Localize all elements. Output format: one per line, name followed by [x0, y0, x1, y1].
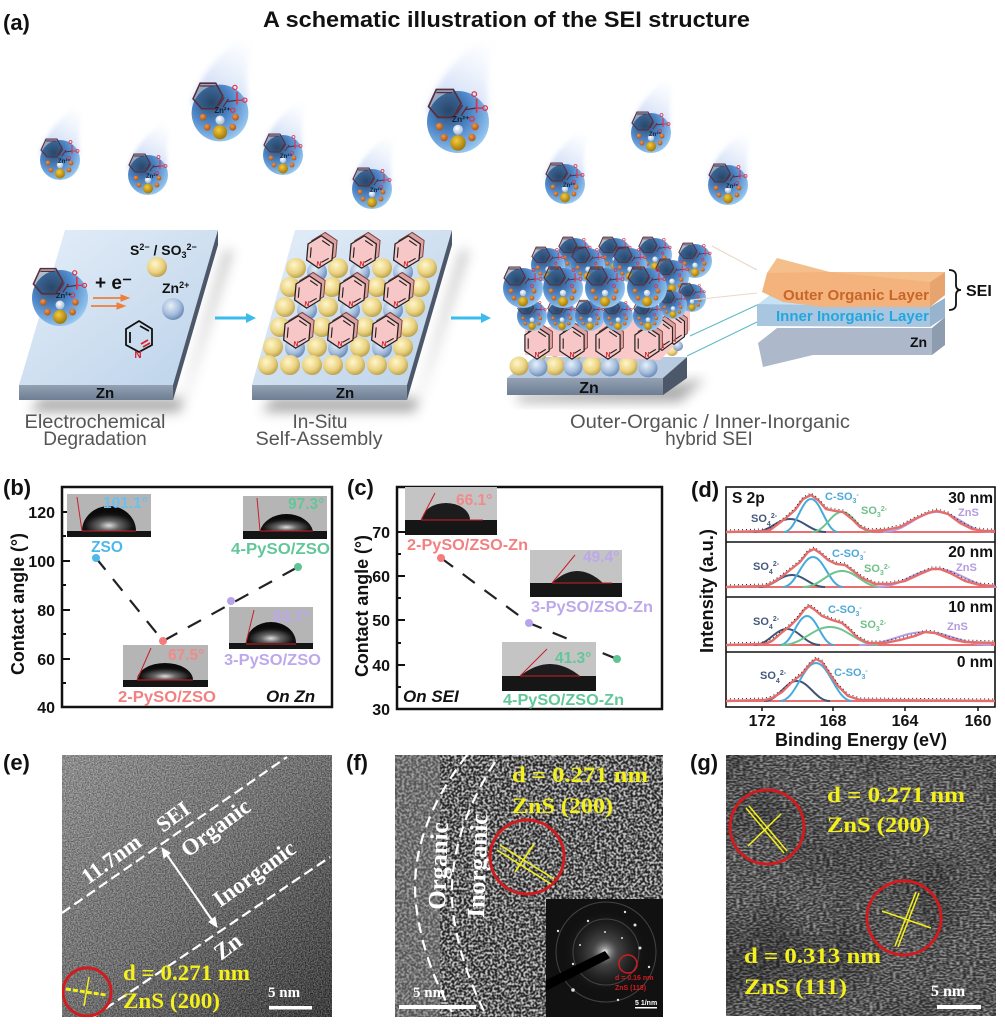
inset: 2-PySO droplet: 67.5°	[168, 647, 204, 664]
depth label 30 nm: 30 nm	[948, 490, 993, 507]
inset: 2-PySO-Zn droplet	[405, 487, 497, 535]
panel: layer diagram	[757, 258, 945, 367]
0 nm peak labels: C-SO	[834, 667, 862, 679]
lattice circle	[63, 968, 111, 1016]
dashed layer boundaries	[415, 755, 495, 1017]
panel: electrochemical degradation	[19, 230, 232, 412]
label: Organic: Organic	[424, 822, 454, 910]
10 nm peak labels: SO	[753, 616, 769, 628]
layer: inner inorganic	[757, 295, 945, 327]
10 nm peak labels: 4	[769, 624, 773, 631]
label: 4-PySO/ZSO: 4-PySO/ZSO	[231, 541, 330, 558]
phase label: ZnS (200)	[512, 793, 613, 818]
label: On SEI: On SEI	[403, 687, 460, 706]
inset: 3-PySO-Zn droplet: 49.4°	[583, 549, 619, 566]
30 nm peak labels: 2-	[881, 506, 888, 513]
inset: 4-PySO-Zn droplet	[502, 642, 596, 691]
y axis title: Contact angle (°)	[352, 535, 372, 677]
zinc ion label: Zn	[162, 280, 179, 296]
panel: TEM image f	[395, 755, 663, 1017]
dashed SEI boundaries	[62, 757, 330, 1017]
panel: TEM image g	[726, 755, 996, 1016]
d-spacing label 200: d = 0.271 nm	[827, 782, 965, 807]
zinc ion label: 2+	[179, 280, 189, 290]
30 nm peak labels: -	[856, 492, 859, 499]
30 nm peak labels: SO	[751, 513, 767, 525]
droplet 3 large	[192, 25, 260, 141]
droplet 6 large	[427, 26, 501, 153]
x tick labels: 168	[820, 713, 846, 730]
30 nm peak labels	[751, 491, 979, 528]
inset: 2-PySO droplet	[123, 645, 208, 687]
20 nm peak labels: -	[863, 549, 866, 556]
droplet 8: Zn²⁺	[649, 131, 662, 138]
zoom guide lines	[687, 246, 757, 356]
droplet 7: Zn²⁺	[563, 182, 576, 189]
caption: in-situ self-assembly	[256, 412, 383, 450]
30 nm peak labels: 2-	[771, 513, 778, 520]
depth label 10 nm: 10 nm	[948, 599, 993, 616]
droplet 9: Zn²⁺	[726, 183, 738, 190]
10 nm peak labels: 2-	[773, 616, 780, 623]
depth label 20 nm: 20 nm	[948, 544, 993, 561]
label: Organic: Organic	[176, 794, 255, 862]
label: outer organic layer: Outer Organic Layer	[783, 287, 929, 304]
20 nm peak labels: SO	[753, 561, 769, 573]
10 nm peak labels	[753, 604, 968, 633]
30 nm peak labels: 3	[852, 498, 856, 505]
0 nm peak labels: 4	[776, 678, 780, 685]
droplet 4	[263, 93, 311, 175]
stacked droplet layer	[503, 237, 712, 331]
data points	[437, 554, 621, 663]
20 nm peak labels: SO	[864, 563, 880, 575]
sulfur and zinc ball array	[258, 258, 437, 375]
panel: in-situ self-assembly	[252, 230, 468, 412]
phase label 111: ZnS (111)	[744, 974, 847, 999]
label: 2-PySO/ZSO-Zn: 2-PySO/ZSO-Zn	[407, 537, 528, 554]
label: ZSO: ZSO	[91, 539, 123, 556]
y axis title: Contact angle (°)	[8, 533, 28, 675]
SAED d-spacing label: d = 0.16 nm	[615, 975, 653, 982]
icon: pyridine molecule: N	[134, 350, 142, 361]
caption: electrochemical degradation: Electrochemical	[24, 412, 166, 433]
30 nm peak labels: 4	[767, 521, 771, 528]
Zn label: Zn	[96, 385, 114, 402]
phase label 200: ZnS (200)	[827, 812, 930, 837]
droplet 5	[352, 127, 400, 209]
y tick labels: 40	[372, 658, 390, 675]
x axis title: Binding Energy (eV)	[775, 730, 947, 750]
inset: 3-PySO droplet: 83.7°	[273, 609, 309, 626]
10 nm peak labels: 2-	[880, 620, 887, 627]
droplet 8	[631, 71, 679, 153]
y tick labels: 60	[37, 652, 55, 669]
Zn label: Zn	[336, 385, 354, 402]
30 nm peak labels: 3	[877, 512, 881, 519]
y tick labels: 60	[372, 569, 390, 586]
0 nm peak labels: 3	[862, 674, 866, 681]
droplet 7	[545, 122, 593, 204]
spectrum 20 nm	[726, 544, 997, 587]
label: SEI: SEI	[151, 796, 195, 837]
30 nm peak labels: SO	[861, 505, 877, 517]
20 nm peak labels: C-SO	[832, 548, 860, 560]
caption: hybrid SEI: Outer-Organic / Inner-Inorganic	[570, 412, 850, 433]
20 nm peak labels: 2-	[884, 564, 891, 571]
inset: ZSO droplet	[67, 494, 151, 537]
icon: zinc ion ball	[162, 298, 184, 320]
20 nm peak labels: 3	[860, 555, 864, 562]
10 nm peak labels: 3	[856, 611, 860, 618]
20 nm peak labels: 2-	[773, 561, 780, 568]
arrow: step 2 to 3	[451, 313, 491, 323]
precursor droplet: Zn²⁺	[56, 291, 72, 300]
droplet 2: Zn²⁺	[146, 173, 158, 180]
scale bar: 5 nm	[931, 983, 966, 1000]
caption: in-situ self-assembly: In-Situ	[293, 412, 347, 433]
pyridine rings	[283, 232, 425, 348]
label: Zn: Zn	[209, 928, 247, 965]
inset: 4-PySO-Zn droplet: 41.3°	[555, 650, 591, 667]
y tick labels: 40	[37, 700, 55, 717]
caption: hybrid SEI	[570, 412, 850, 450]
spectrum 30 nm	[726, 490, 995, 532]
sulfur species label: 3	[182, 250, 187, 260]
dashed trend line	[441, 558, 617, 659]
20 nm peak labels: 3	[880, 570, 884, 577]
label: 2-PySO/ZSO: 2-PySO/ZSO	[118, 689, 216, 706]
10 nm peak labels: 3	[876, 626, 880, 633]
layer: outer organic	[762, 258, 945, 307]
0 nm peak labels	[760, 667, 868, 685]
depth label 0 nm: 0 nm	[957, 654, 993, 671]
x tick labels	[749, 713, 991, 730]
inset: 4-PySO droplet	[243, 496, 327, 539]
icon: sulfur ball	[147, 257, 167, 277]
x tick labels: 172	[749, 713, 775, 730]
label: SEI thickness: 11.7nm	[76, 829, 146, 889]
sulfur species label: 2−	[139, 242, 150, 252]
0 nm peak labels: 2-	[780, 670, 787, 677]
sulfur species label: 2−	[187, 242, 197, 252]
y tick labels	[372, 525, 390, 719]
inset: 3-PySO droplet	[229, 607, 313, 649]
inset: 4-PySO droplet: 97.3°	[288, 496, 324, 513]
spectrum 10 nm	[726, 599, 995, 645]
panel label (b): (b)	[3, 475, 31, 500]
inset: 2-PySO-Zn droplet: 66.1°	[456, 492, 492, 509]
x tick labels: 160	[965, 713, 991, 730]
label: Zn layer: Zn	[910, 334, 927, 350]
SEI label: SEI	[966, 283, 992, 300]
20 nm peak labels: ZnS	[956, 562, 977, 574]
lattice circle	[490, 820, 564, 894]
label: 3-PySO/ZSO-Zn: 3-PySO/ZSO-Zn	[531, 599, 653, 616]
panel label (d): (d)	[691, 477, 719, 502]
scale bar: 5 nm	[268, 985, 301, 1001]
droplet 1	[40, 98, 88, 180]
y tick labels: 80	[37, 603, 55, 620]
lattice circle 2	[867, 881, 941, 955]
panel label (c): (c)	[347, 475, 374, 500]
inset: SAED pattern	[546, 899, 663, 1017]
caption: hybrid SEI: hybrid SEI	[665, 429, 753, 450]
organic pyridine layer	[525, 310, 690, 360]
y tick labels: 120	[28, 505, 55, 522]
sulfur species label: / SO	[150, 242, 182, 258]
10 nm peak labels: ZnS	[947, 621, 968, 633]
arrow: step 1 to 2	[215, 313, 256, 323]
droplet 1: Zn²⁺	[58, 158, 70, 165]
SAED plane label: ZnS (118)	[615, 985, 646, 992]
falling droplets	[40, 25, 756, 209]
d-spacing label: d = 0.271 nm	[512, 762, 648, 787]
y tick labels: 70	[372, 525, 390, 542]
y tick labels: 30	[372, 702, 390, 719]
caption: electrochemical degradation: Degradation	[43, 429, 147, 450]
panel label (e): (e)	[3, 750, 30, 775]
droplet 2	[128, 113, 176, 195]
Zn label: Zn	[579, 380, 599, 397]
arrow: SEI thickness	[162, 848, 217, 927]
droplet 4: Zn²⁺	[280, 153, 292, 160]
d-spacing label 111: d = 0.313 nm	[744, 943, 881, 968]
10 nm peak labels: SO	[860, 619, 876, 631]
scale bar	[932, 986, 981, 1009]
10 nm peak labels: C-SO	[828, 604, 856, 616]
30 nm peak labels: C-SO	[825, 491, 852, 503]
20 nm peak labels: 4	[769, 569, 773, 576]
chart: S 2p XPS depth profile	[697, 487, 997, 750]
icon: orange reaction arrows	[91, 295, 129, 309]
data points	[92, 554, 302, 645]
label: 3-PySO/ZSO: 3-PySO/ZSO	[224, 652, 321, 669]
title: A schematic illustration of the SEI structure	[263, 7, 750, 32]
panel: TEM image e	[62, 755, 332, 1017]
y tick labels: 50	[372, 613, 390, 630]
chart: contact angle on SEI	[352, 487, 662, 719]
inset: ZSO droplet: 101.1°	[103, 495, 148, 512]
label: Inorganic: Inorganic	[208, 835, 300, 912]
0 nm peak labels: SO	[760, 670, 776, 682]
label: S 2p: S 2p	[732, 490, 765, 507]
0 nm peak labels: -	[865, 668, 868, 675]
spectrum 0 nm	[726, 654, 995, 701]
y axis title: Intensity (a.u.)	[697, 529, 717, 653]
caption: in-situ self-assembly: Self-Assembly	[256, 429, 383, 450]
scale bar: 5 nm	[413, 985, 446, 1001]
phase label: ZnS (200)	[123, 988, 220, 1013]
20 nm peak labels	[753, 548, 977, 577]
sulfur species label: S	[130, 242, 139, 258]
scale bar	[399, 988, 476, 1009]
icon: pyridine molecule	[126, 321, 152, 361]
d-spacing label: d = 0.271 nm	[123, 960, 250, 985]
label: 4-PySO/ZSO-Zn: 4-PySO/ZSO-Zn	[503, 692, 624, 709]
y tick labels	[28, 505, 55, 717]
label: inner inorganic layer: Inner Inorganic Layer	[776, 308, 929, 325]
caption: electrochemical degradation	[24, 412, 166, 450]
panel label (g): (g)	[690, 750, 718, 775]
panel label (f): (f)	[346, 750, 368, 775]
droplet 3 large: Zn²⁺	[214, 106, 231, 115]
dashed trend line	[96, 558, 298, 641]
droplet 9	[708, 123, 756, 205]
precursor droplet	[32, 269, 88, 326]
electron gain label: + e⁻	[95, 273, 132, 294]
scale bar	[268, 988, 312, 1010]
chart: contact angle on Zn	[8, 487, 332, 717]
10 nm peak labels: -	[859, 605, 862, 612]
droplet 6 large: Zn²⁺	[452, 114, 470, 124]
panel: hybrid SEI stack	[503, 237, 712, 402]
SAED scale bar: 5 1/nm	[635, 1000, 657, 1007]
lattice circle 1	[730, 790, 804, 864]
y tick labels: 100	[28, 554, 55, 571]
inset: 3-PySO-Zn droplet	[530, 549, 622, 597]
label: On Zn: On Zn	[266, 687, 315, 706]
droplet 5: Zn²⁺	[370, 187, 382, 194]
layer: Zn	[758, 317, 945, 367]
30 nm peak labels: ZnS	[958, 507, 979, 519]
panel label (a): (a)	[3, 10, 30, 35]
SEI brace	[949, 270, 961, 310]
inorganic ball layer	[510, 341, 683, 378]
label: Inorganic: Inorganic	[463, 813, 494, 918]
x tick labels: 164	[892, 713, 918, 730]
